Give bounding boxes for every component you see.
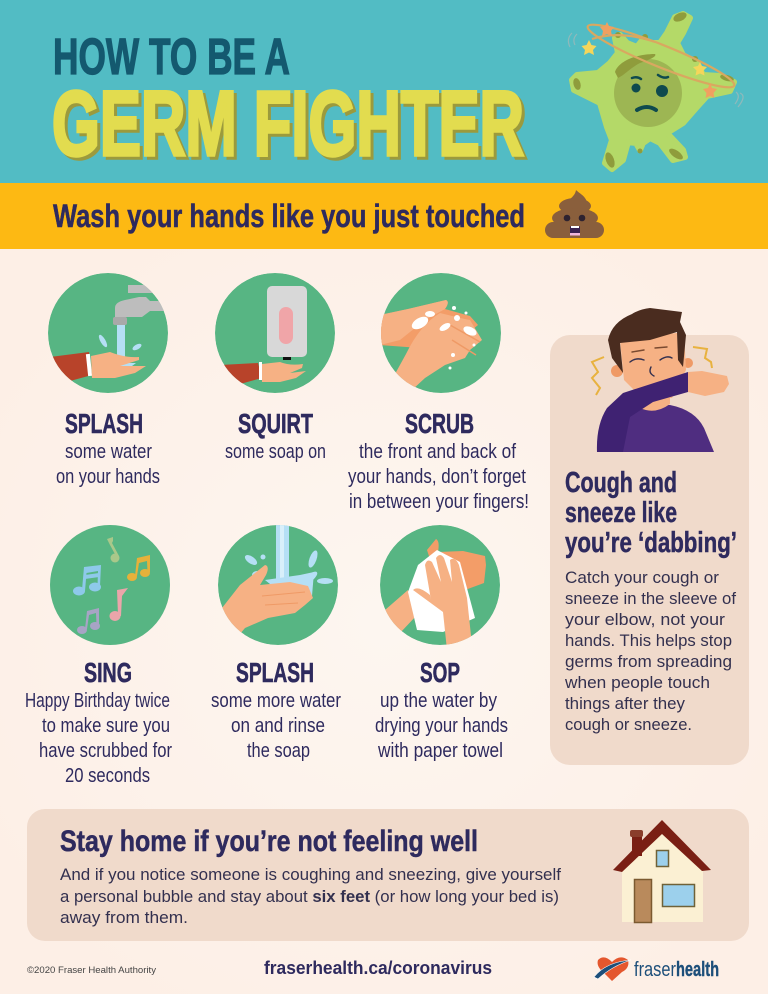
stay home heading: Stay home if you’re not feeling well	[60, 825, 478, 858]
icon: person coughing into elbow	[592, 308, 729, 452]
step text: second splash: some more water	[211, 690, 341, 712]
step text: sing: to make sure you	[42, 715, 170, 737]
step text: sop: drying your hands	[375, 715, 508, 737]
stay home text	[60, 865, 561, 927]
step text: splash: on your hands	[56, 466, 160, 488]
panel heading	[565, 467, 737, 559]
logo: fraser health: health	[676, 959, 719, 981]
step text: squirt: some soap on	[225, 441, 326, 463]
icon: music notes	[73, 537, 150, 634]
logo: fraser health	[594, 957, 719, 981]
step text: scrub: in between your fingers!	[349, 491, 529, 513]
step text: sop: with paper towel	[377, 740, 503, 762]
panel paragraph: Catch your cough or	[565, 568, 719, 587]
step text: sing: Happy Birthday twice	[25, 690, 170, 712]
panel paragraph: hands. This helps stop	[565, 631, 732, 650]
step: scrub illustration	[375, 273, 501, 393]
step text: second splash	[211, 690, 341, 762]
step: squirt illustration	[215, 273, 335, 393]
icon: dizzy germ	[568, 10, 743, 169]
icon: house	[613, 820, 711, 922]
title line 2	[52, 73, 527, 178]
step text: sing	[25, 690, 172, 787]
panel paragraph	[564, 568, 736, 734]
step text: sop: up the water by	[380, 690, 497, 712]
header band	[0, 0, 768, 183]
step: sop illustration	[380, 525, 500, 650]
title line 2: GERM FIGHTER	[55, 76, 527, 178]
url: fraserhealth.ca/coronavirus	[264, 958, 492, 978]
stay home text: away from them.	[60, 908, 188, 927]
banner text: Wash your hands like you just touched	[53, 198, 525, 234]
panel paragraph: cough or sneeze.	[565, 715, 692, 734]
yellow banner	[0, 183, 768, 249]
step text: scrub: the front and back of	[359, 441, 516, 463]
icon: poop emoji	[545, 190, 604, 238]
step: sing illustration	[50, 525, 170, 645]
step label: scrub: SCRUB	[405, 408, 474, 439]
panel heading: Cough and	[565, 467, 677, 499]
stay home text: a personal bubble and stay about six feet (or how long your bed is)	[60, 887, 559, 906]
stay home text: And if you notice someone is coughing and sneezing, give yourself	[60, 865, 561, 884]
step text: sop	[375, 690, 508, 762]
step label: second splash: SPLASH	[236, 657, 314, 688]
panel paragraph: your elbow, not your	[565, 610, 725, 629]
title line 2: GERM FIGHTER	[52, 73, 524, 175]
panel: stay home	[27, 809, 749, 941]
panel heading: sneeze like	[565, 497, 677, 529]
step text: second splash: on and rinse	[231, 715, 325, 737]
step text: splash: some water	[65, 441, 152, 463]
step text: splash	[56, 441, 160, 488]
panel paragraph: germs from spreading	[565, 652, 732, 671]
step text: sing: have scrubbed for	[39, 740, 172, 762]
step: splash illustration	[48, 273, 170, 393]
logo: fraser health: fraser	[634, 959, 676, 981]
step text: second splash: the soap	[247, 740, 310, 762]
step: second splash illustration	[218, 520, 338, 645]
panel paragraph: things after they	[565, 694, 685, 713]
panel paragraph: when people touch	[564, 673, 710, 692]
panel: cough and sneeze	[550, 308, 749, 765]
step text: scrub: your hands, don’t forget	[348, 466, 526, 488]
step text: scrub	[348, 441, 529, 513]
panel paragraph: sneeze in the sleeve of	[565, 589, 736, 608]
step label: sop: SOP	[420, 657, 460, 688]
step label: splash: SPLASH	[65, 408, 143, 439]
step text: sing: 20 seconds	[65, 765, 150, 787]
step label: squirt: SQUIRT	[238, 408, 313, 439]
title line 1: HOW TO BE A	[53, 28, 290, 85]
copyright: ©2020 Fraser Health Authority	[27, 965, 156, 976]
step label: sing: SING	[84, 657, 132, 688]
